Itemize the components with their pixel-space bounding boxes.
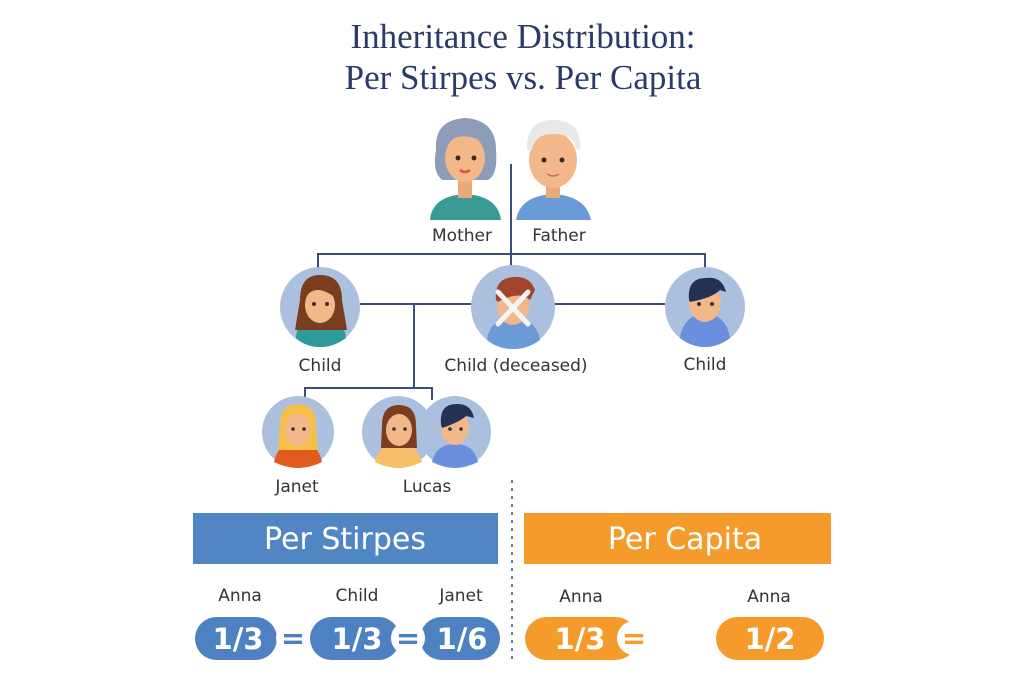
label: mother father: Father xyxy=(532,226,586,246)
labels: children: Child (deceased) xyxy=(444,356,588,376)
title xyxy=(345,17,702,97)
icon: child left xyxy=(280,267,360,347)
pills: per stirpes: 1/3 xyxy=(213,622,263,656)
divider xyxy=(511,480,513,662)
icon: father xyxy=(516,120,591,220)
names: per stirpes: Anna xyxy=(218,586,262,606)
icon: lucas xyxy=(362,396,491,468)
pills: per capita: 1/2 xyxy=(745,622,795,656)
label: mother father: Mother xyxy=(432,226,492,246)
labels: grandchildren: Lucas xyxy=(403,477,451,497)
header: per stirpes xyxy=(193,513,498,564)
pills: per stirpes: 1/6 xyxy=(437,622,487,656)
panel: per stirpes xyxy=(193,513,500,660)
labels: grandchildren: Janet xyxy=(274,477,319,497)
pills: per stirpes: = xyxy=(396,621,420,655)
icon: mother xyxy=(430,118,501,220)
names: per capita: Anna xyxy=(747,587,791,607)
names: per capita xyxy=(559,587,791,607)
title: Inheritance Distribution: xyxy=(350,17,696,56)
labels: children xyxy=(299,355,726,376)
title: Per Stirpes vs. Per Capita xyxy=(345,58,702,97)
pills: per stirpes: 1/3 xyxy=(332,622,382,656)
names: per stirpes: Child xyxy=(336,586,378,606)
pills: per capita xyxy=(525,617,824,660)
panel: per capita xyxy=(524,513,831,660)
label: mother father xyxy=(432,226,586,246)
labels: children: Child xyxy=(684,355,726,375)
icon: child deceased xyxy=(471,265,555,349)
labels: children: Child xyxy=(299,356,341,376)
icon: janet xyxy=(262,396,334,468)
pills: per capita: = xyxy=(622,621,646,655)
header: per capita: Per Capita xyxy=(608,522,762,557)
header: per capita xyxy=(524,513,831,564)
pills: per stirpes: = xyxy=(281,621,305,655)
tree connector lines xyxy=(305,164,705,400)
header: per stirpes: Per Stirpes xyxy=(264,522,426,557)
names: per stirpes: Janet xyxy=(438,586,483,606)
icon: child right xyxy=(665,267,745,347)
pills: per stirpes xyxy=(195,617,500,660)
pills: per capita: 1/3 xyxy=(555,622,605,656)
labels: grandchildren xyxy=(274,477,451,497)
names: per capita: Anna xyxy=(559,587,603,607)
names: per stirpes xyxy=(218,586,483,606)
